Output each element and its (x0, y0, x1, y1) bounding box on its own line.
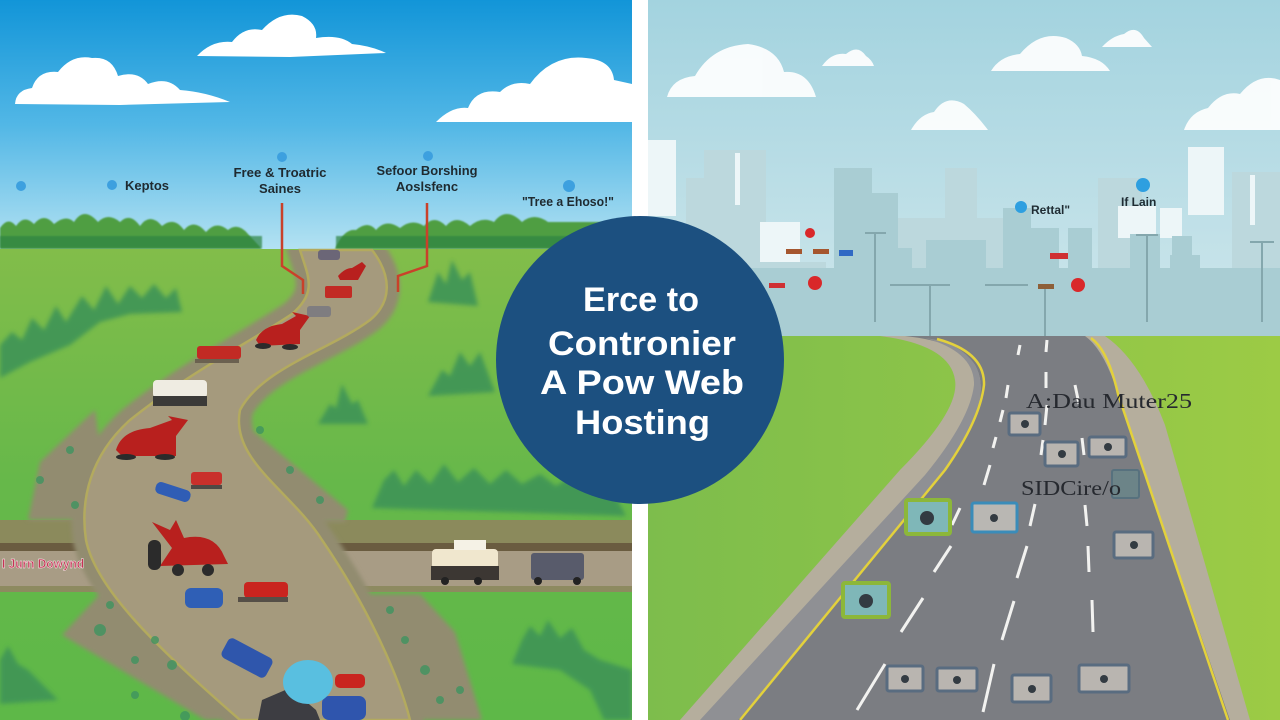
city skyline front (648, 168, 1280, 340)
badge title: Hosting (575, 404, 710, 442)
right sky (648, 0, 1280, 340)
road shoulder (680, 336, 1250, 720)
label: Rettal: Rettal" (1031, 203, 1070, 217)
city skyline back (686, 150, 1280, 342)
badge title: Contronier (548, 325, 736, 363)
vehicles: red tractors (116, 262, 366, 566)
road overlay text (1021, 389, 1192, 500)
road inner edge band (700, 338, 981, 720)
label: Tree a Ehoso: "Tree a Ehoso!" (522, 194, 614, 209)
right label icons (1015, 178, 1150, 213)
right labels (1031, 195, 1156, 217)
right ground grass (648, 336, 1280, 720)
left label icons (16, 151, 575, 192)
left grass (0, 249, 632, 720)
text: A:Dau Muter25: A:Dau Muter25 (1026, 389, 1192, 413)
street lamps (865, 233, 1274, 336)
left sky (0, 0, 632, 250)
tree line left (0, 214, 632, 249)
clouds right (667, 30, 1280, 130)
text: SIDCire/o: SIDCire/o (1021, 476, 1121, 500)
badge title: Erce to (583, 281, 699, 319)
panel: congested road (left) (0, 0, 632, 720)
label: Sefoor Borshing: Sefoor Borshing (376, 163, 478, 178)
label: Saines: Saines (259, 181, 301, 196)
label: Free & Troatric: Free & Troatric (234, 165, 326, 180)
label: Keptos: Keptos (125, 178, 169, 193)
white divider (632, 0, 648, 720)
winding dirt road (84, 250, 410, 720)
road surface (738, 336, 1230, 720)
red connector lines (282, 203, 427, 294)
cross road (0, 520, 632, 592)
badge title: A Pow Web (540, 364, 744, 402)
label: Aoslsfenc: Aoslsfenc (396, 179, 458, 194)
container icons (843, 413, 1153, 702)
badge title (540, 281, 744, 442)
yellow edge lines (740, 338, 1228, 720)
city skyline white blocks (648, 140, 1255, 262)
clouds left (15, 15, 632, 122)
panel: clear highway (right) (648, 0, 1280, 720)
central circle badge (496, 216, 784, 504)
trucks on cross road (431, 540, 584, 585)
pine clusters left (0, 260, 632, 720)
turquoise vehicle (258, 660, 333, 720)
label: If Lain: If Lain (1121, 195, 1156, 209)
vehicles: small trucks (153, 250, 366, 720)
traffic lights and signs (769, 228, 1085, 292)
left labels (125, 163, 614, 209)
rocky verge (28, 250, 482, 720)
lane markings (857, 340, 1093, 712)
road sign text: I Jurn Dowynd (2, 556, 84, 571)
shrubs on verge (36, 426, 464, 720)
